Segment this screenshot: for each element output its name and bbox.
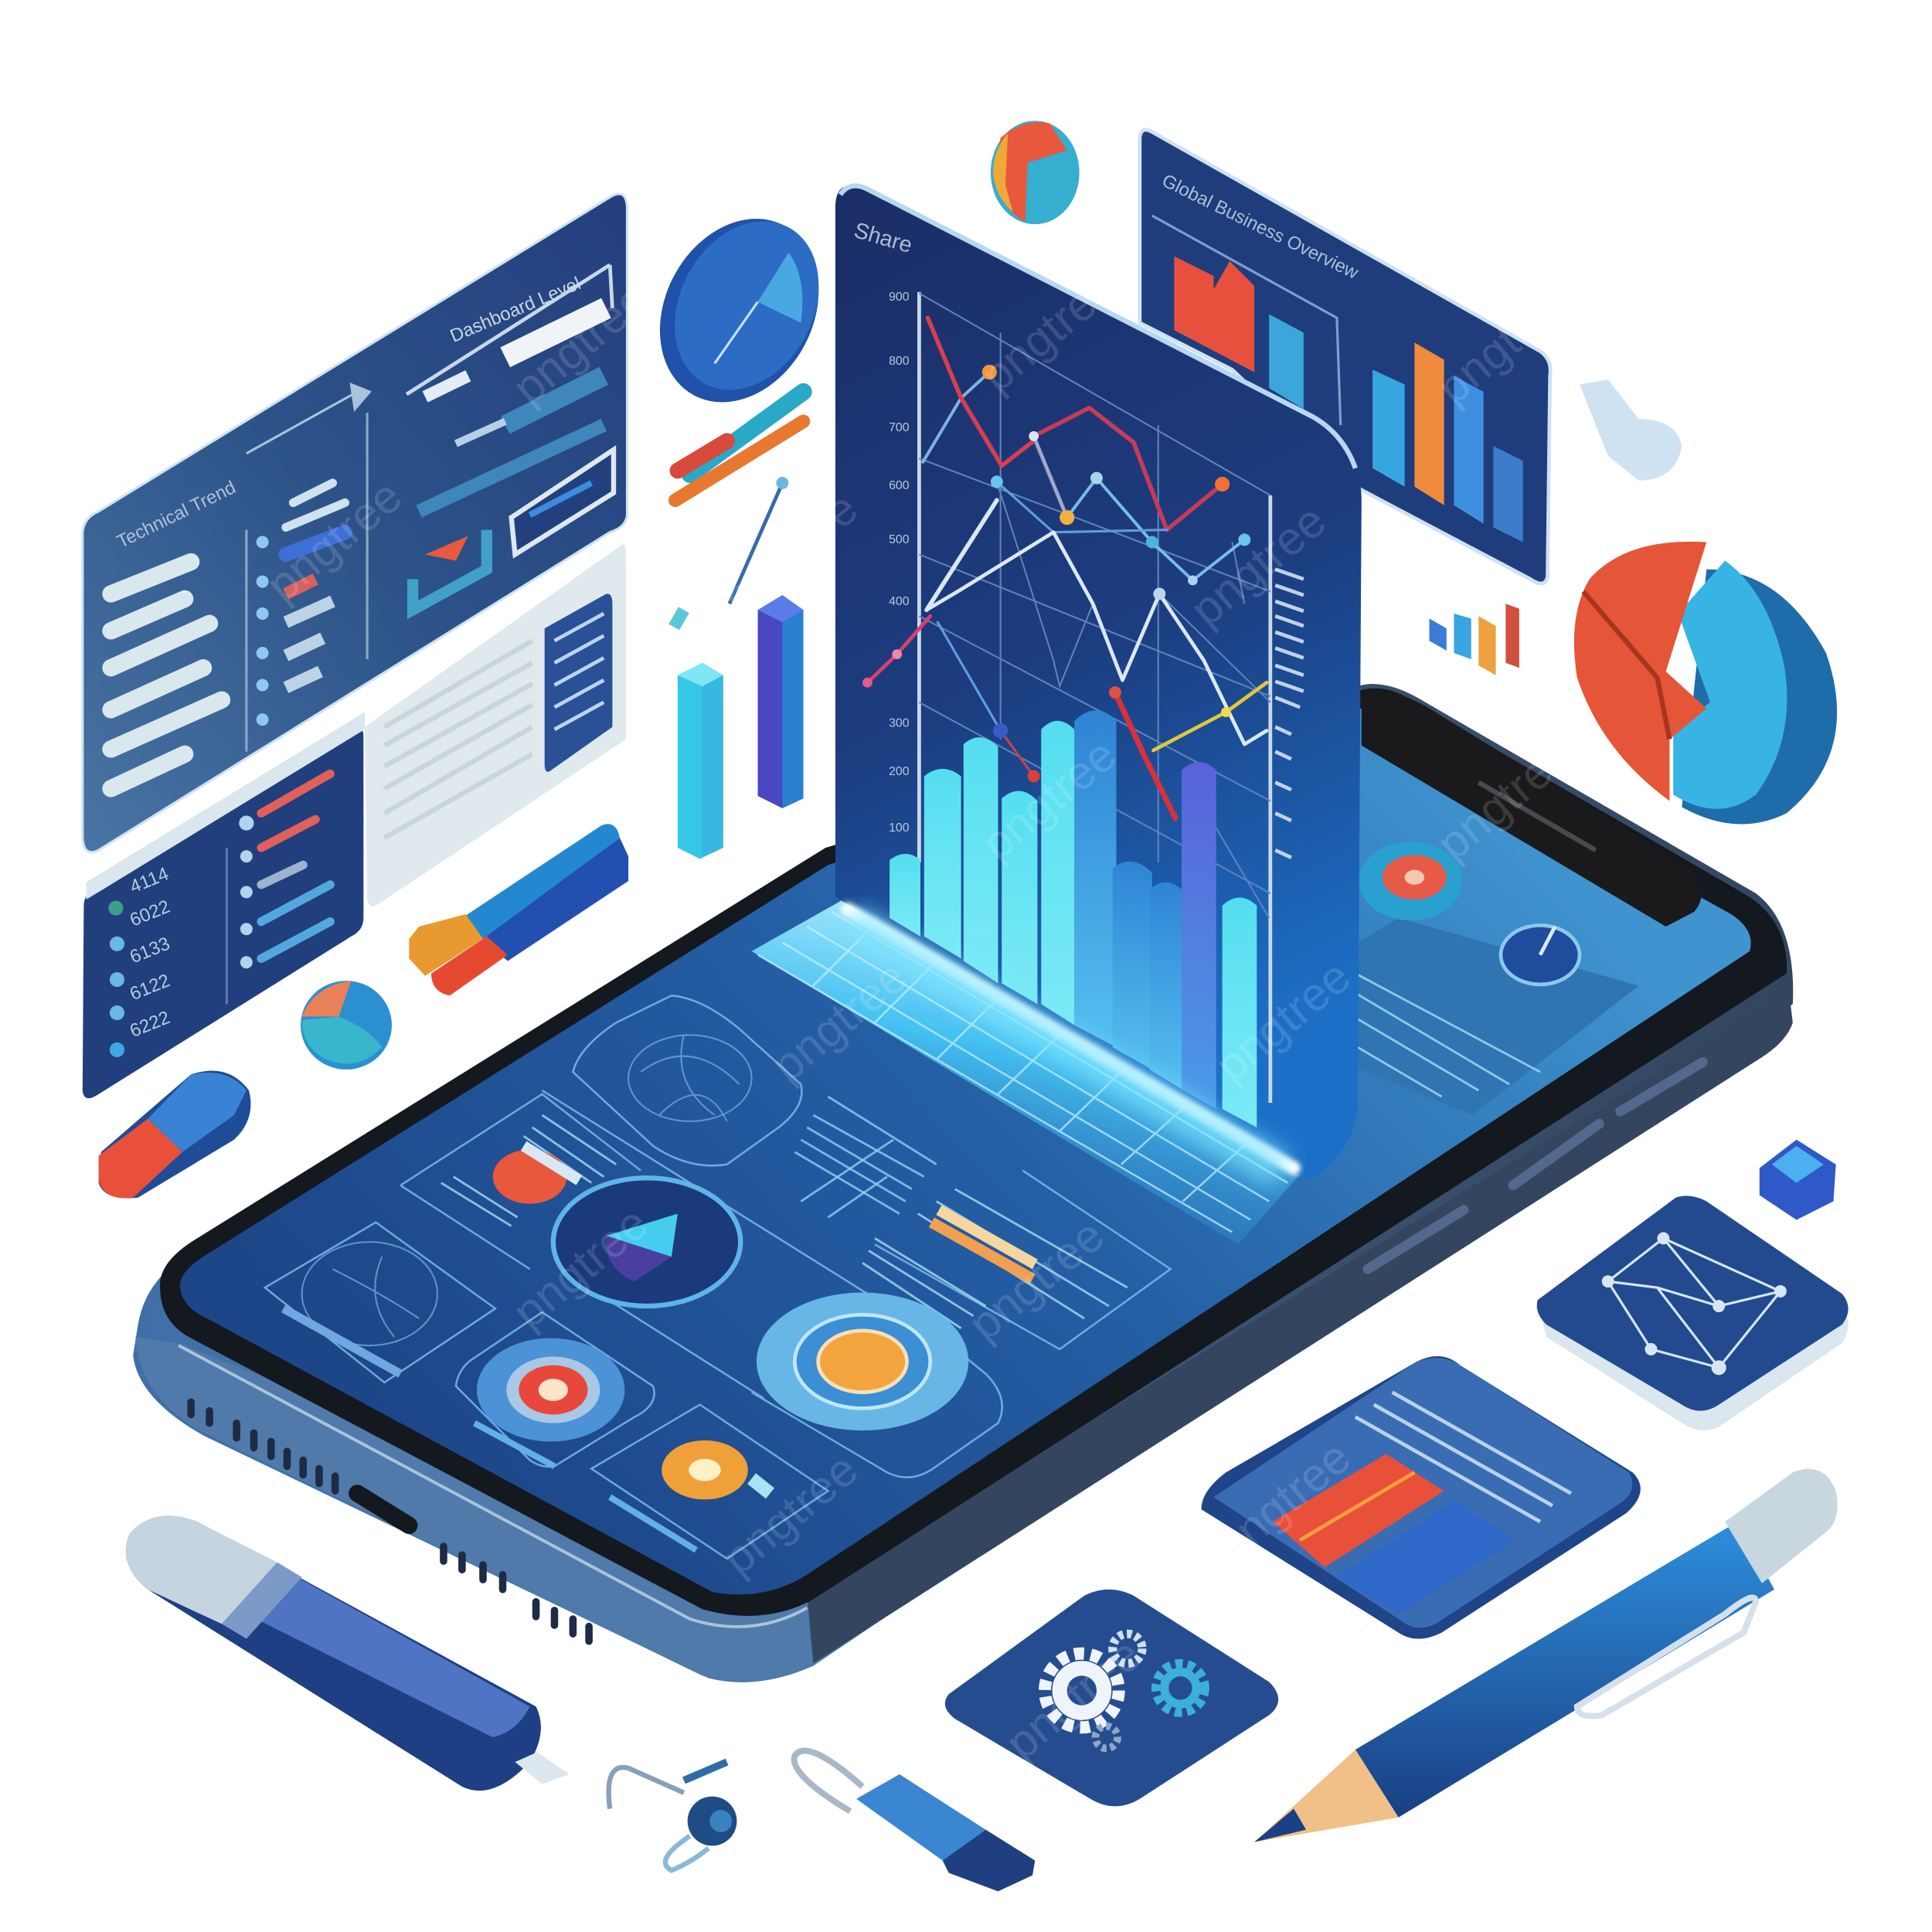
data points bbox=[862, 365, 1250, 782]
network graph bbox=[1603, 1233, 1785, 1374]
orange dot bbox=[662, 1440, 770, 1499]
bar chart columns bbox=[889, 710, 1257, 1128]
glow seam bbox=[848, 910, 1294, 1168]
divider bbox=[226, 848, 227, 1004]
colored bars bbox=[1372, 342, 1523, 543]
orange stripes bbox=[931, 1210, 1035, 1279]
left rows bbox=[127, 863, 173, 1042]
icon: dotted trend bbox=[668, 477, 788, 630]
tile: network bbox=[1537, 1196, 1849, 1430]
watermarks: pngtree bbox=[256, 469, 411, 611]
icon: blue clock disc bbox=[629, 191, 849, 430]
watermarks: pngtree bbox=[1624, 1406, 1779, 1548]
watermarks: pngtree bbox=[1205, 950, 1360, 1092]
text lines bbox=[384, 641, 532, 838]
dividers bbox=[247, 413, 367, 752]
tile: gears bbox=[945, 1590, 1278, 1806]
watermarks: pngtree bbox=[502, 1196, 658, 1338]
left rows: 6022 bbox=[127, 896, 173, 931]
icon: marker bbox=[126, 1516, 570, 1791]
axis frame bbox=[919, 292, 1270, 1103]
watermarks: pngtree bbox=[1180, 494, 1335, 636]
y axis labels: 100 bbox=[889, 821, 910, 835]
right screen text block background bbox=[1337, 918, 1639, 1115]
bezel bbox=[160, 689, 1787, 1616]
big orange target bbox=[757, 1293, 968, 1430]
watermarks: pngtree bbox=[1427, 728, 1582, 870]
icon: red and blue pill bbox=[99, 1070, 250, 1199]
watermarks: pngtree bbox=[712, 1443, 867, 1585]
panel subheading: Dashboard Level bbox=[447, 273, 583, 347]
icon: usb key bbox=[794, 1750, 1035, 1891]
small labels on widget bbox=[284, 1308, 400, 1374]
icon: faded bookmark bbox=[1580, 379, 1682, 481]
panel top highlight bbox=[840, 185, 1355, 468]
watermarks: pngtree bbox=[761, 950, 917, 1092]
side buttons bbox=[1368, 1062, 1702, 1269]
right dots bbox=[239, 815, 253, 968]
text lines bbox=[441, 974, 1540, 1328]
panel heading: Technical Trend bbox=[114, 477, 239, 553]
watermarks: pngtree bbox=[502, 272, 658, 414]
screen bbox=[180, 709, 1751, 1594]
table lines bbox=[794, 1097, 937, 1217]
phone bbox=[133, 684, 1793, 1682]
pie gauge widget bbox=[553, 1178, 740, 1306]
watermarks: pngtree bbox=[958, 1209, 1114, 1351]
icon: stacked bar bbox=[409, 824, 628, 995]
frame bbox=[1152, 216, 1341, 425]
light strip bbox=[87, 713, 365, 900]
y axis labels: 800 bbox=[889, 355, 910, 368]
white stripes near pill bbox=[524, 1146, 579, 1180]
right screen gauge bbox=[1501, 925, 1580, 985]
inset lines bbox=[554, 614, 604, 730]
phone left lower side bbox=[135, 1337, 813, 1681]
red bars bbox=[1174, 257, 1254, 372]
icon: small bars cluster bbox=[1429, 604, 1519, 675]
data lines bbox=[867, 318, 1267, 818]
icon: pencil bbox=[1254, 1469, 1838, 1842]
card outlines bbox=[265, 995, 1171, 1559]
panel: light text card bbox=[365, 544, 626, 906]
speaker line bbox=[1478, 782, 1596, 850]
left rows: 6122 bbox=[127, 970, 173, 1005]
icon: mini bars bbox=[675, 392, 804, 500]
right controls bbox=[406, 265, 614, 610]
icon: cube bbox=[1760, 1140, 1836, 1219]
label bar bbox=[474, 1423, 696, 1550]
panel: central chart bbox=[835, 185, 1362, 1180]
watermarks: pngtree bbox=[712, 481, 867, 624]
panel title: Share bbox=[851, 218, 915, 258]
right bars bbox=[261, 774, 330, 958]
y axis labels: 200 bbox=[889, 765, 910, 778]
pill widget red bbox=[493, 1150, 566, 1204]
y axis labels: 400 bbox=[889, 595, 910, 608]
left list bars bbox=[111, 562, 222, 788]
phone bottom speaker dots bbox=[191, 1402, 589, 1641]
y axis labels: 500 bbox=[889, 533, 910, 546]
panel: lower left list bbox=[83, 713, 365, 1098]
chrome edge bbox=[179, 1345, 807, 1627]
tile text lines bbox=[1355, 1393, 1571, 1522]
pen clip bbox=[1577, 1597, 1756, 1716]
y axis labels: 300 bbox=[889, 717, 910, 730]
watermarks: pngtree bbox=[995, 1628, 1151, 1770]
blue hatched bar bbox=[1269, 315, 1304, 409]
watermarks: pngtree bbox=[971, 728, 1126, 870]
panel title: Global Business Overview bbox=[1158, 170, 1362, 284]
icon: top pie bbox=[991, 121, 1080, 224]
glow halo bbox=[850, 922, 1281, 1171]
row dots bbox=[108, 900, 124, 1057]
gears bbox=[1045, 1634, 1205, 1748]
tile: chart bbox=[1202, 1356, 1641, 1639]
left rows: 6133 bbox=[127, 933, 173, 968]
screen widgets bbox=[265, 974, 1540, 1559]
grid lines bbox=[919, 293, 1270, 918]
y axis labels bbox=[889, 291, 910, 835]
icon: small pie bbox=[301, 981, 392, 1070]
icon: big pie bbox=[1574, 542, 1837, 824]
icon: clip hook bbox=[609, 1762, 736, 1870]
middle list bbox=[257, 483, 345, 726]
red target bbox=[477, 1338, 624, 1441]
phone body bbox=[133, 684, 1793, 1682]
panel: left main dashboard bbox=[83, 194, 628, 852]
globe sketch bbox=[302, 1035, 752, 1345]
red bars bbox=[1273, 1454, 1444, 1567]
watermarks: pngtree bbox=[1427, 272, 1582, 414]
right screen target bbox=[1359, 842, 1463, 920]
glow grid bbox=[758, 912, 1287, 1232]
icon: cyan column bbox=[678, 663, 723, 859]
blue bars bbox=[1337, 1501, 1515, 1614]
y axis labels: 700 bbox=[889, 421, 910, 434]
icon: purple column bbox=[758, 595, 804, 808]
y axis labels: 600 bbox=[889, 479, 910, 492]
panel: top right bar charts bbox=[1140, 130, 1550, 583]
glow pad under chart bbox=[752, 897, 1308, 1244]
bar separator bbox=[1300, 1472, 1414, 1540]
charging port bbox=[357, 1493, 409, 1526]
watermarks bbox=[256, 260, 1779, 1770]
earpiece area bbox=[1362, 692, 1702, 927]
y axis labels: 900 bbox=[889, 291, 910, 304]
watermarks: pngtree bbox=[971, 260, 1126, 402]
inset blue card bbox=[545, 594, 612, 772]
left rows: 4114 bbox=[127, 863, 172, 897]
left rows: 6222 bbox=[127, 1007, 173, 1042]
arrow bbox=[247, 384, 369, 454]
phone right side bbox=[807, 992, 1793, 1663]
watermarks: pngtree bbox=[1205, 1430, 1360, 1573]
right ticks bbox=[1275, 570, 1304, 858]
